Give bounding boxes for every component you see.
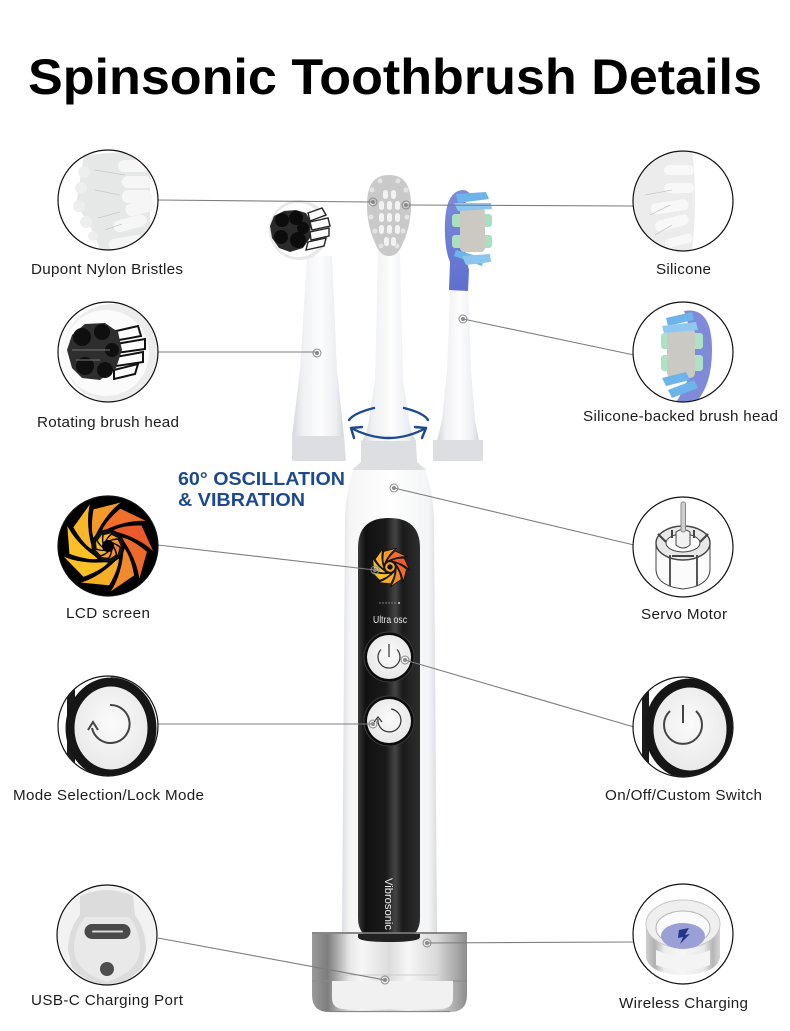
label: USB-C Charging Port: USB-C Charging Port [31, 992, 184, 1009]
label: LCD screen: LCD screen [66, 605, 150, 622]
label: Rotating brush head: Rotating brush head [37, 414, 179, 431]
leader: Dupont Nylon Bristles [158, 200, 373, 202]
inset: On/Off/Custom Switch [633, 670, 733, 782]
oscillation text: 60° OSCILLATION [178, 468, 345, 489]
rotating brush head [269, 200, 346, 461]
label: Silicone: Silicone [656, 261, 711, 278]
label: Dupont Nylon Bristles: Dupont Nylon Bristles [31, 261, 183, 278]
charge dots [379, 602, 400, 604]
glass charging base [312, 930, 467, 1012]
leader: Silicone-backed brush head [463, 319, 634, 355]
leader: LCD screen [158, 545, 375, 570]
title: Spinsonic Toothbrush Details [28, 49, 762, 105]
mode button [364, 696, 414, 746]
leader: On/Off/Custom Switch [405, 660, 634, 727]
inset: Mode Selection/Lock Mode [58, 670, 160, 782]
inset: Silicone [633, 150, 733, 252]
callout dots [313, 198, 467, 984]
handle brand: Vibrosonic [382, 878, 394, 930]
silicone-backed brush head [433, 190, 492, 461]
sonic brush head [362, 175, 416, 441]
leader: Rotating brush head [158, 351, 317, 353]
label: Mode Selection/Lock Mode: Mode Selection/Lock Mode [13, 787, 204, 804]
inset: Dupont Nylon Bristles [58, 150, 158, 251]
leader: USB-C [158, 938, 385, 980]
display panel [358, 518, 420, 942]
power button [364, 632, 414, 682]
label: Servo Motor: Servo Motor [641, 606, 727, 623]
inset: USB-C Charging Port [57, 885, 157, 985]
inset: Wireless Charging [633, 884, 733, 984]
label: Silicone-backed brush head: Silicone-backed brush head [583, 408, 778, 425]
oscillation text: & VIBRATION [178, 489, 305, 510]
leader: Silicone [406, 205, 633, 206]
mode readout: Ultra osc [373, 615, 407, 626]
inset: Servo Motor [633, 497, 733, 597]
oscillation text [178, 468, 345, 510]
small screen swirl [367, 544, 412, 590]
leader: Mode Selection [158, 723, 373, 725]
inset: Silicone-backed brush head [633, 302, 733, 402]
label: On/Off/Custom Switch: On/Off/Custom Switch [605, 787, 762, 804]
inset: Rotating brush head [58, 302, 161, 402]
oscillation arrows [349, 408, 428, 438]
toothbrush handle [342, 441, 437, 942]
leader: Servo Motor [394, 488, 634, 545]
label: Wireless Charging: Wireless Charging [619, 995, 748, 1012]
leader: Wireless Charging [427, 942, 634, 943]
inset: LCD screen [53, 492, 160, 600]
